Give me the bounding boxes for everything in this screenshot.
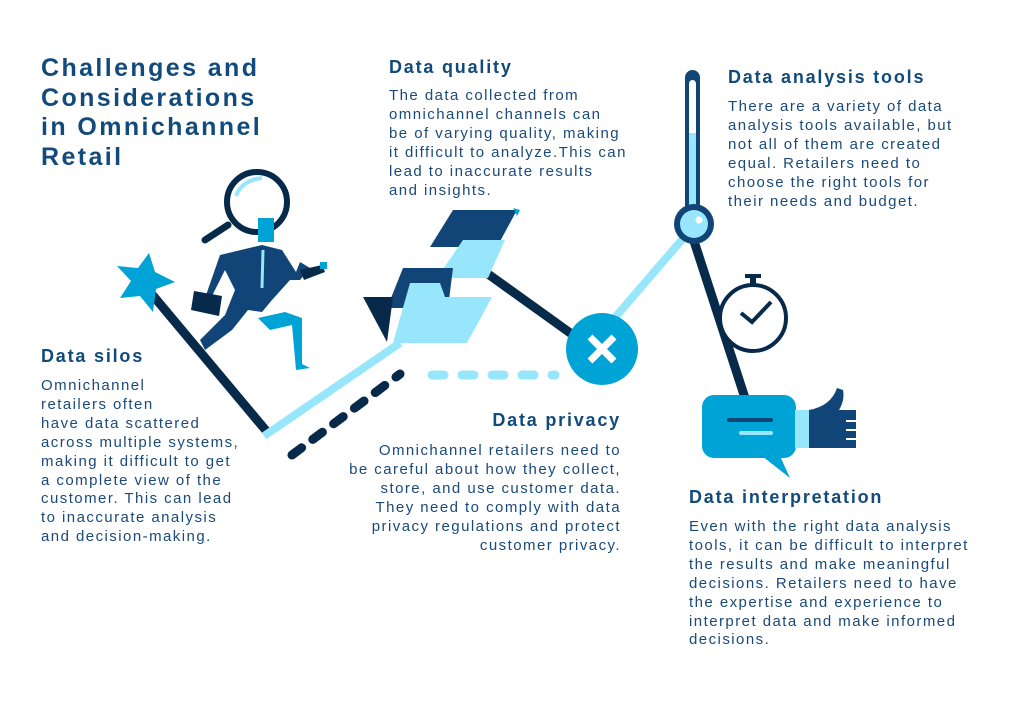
text: data privacy: be careful about how they collect, (349, 461, 621, 478)
icon: speech bubble thumb (702, 388, 858, 478)
icon: magnifier person (191, 172, 327, 370)
title (41, 54, 262, 170)
heading: data privacy: Data privacy (492, 410, 621, 430)
text: data interpretation: Even with the right data analysis (689, 518, 952, 535)
text: data analysis tools (728, 98, 953, 210)
icon: x circle (566, 313, 638, 385)
text: data privacy: privacy regulations and protect (372, 518, 621, 535)
text: data analysis tools: their needs and budget. (728, 193, 919, 210)
text: data quality: omnichannel channels can (389, 106, 601, 123)
text: data silos: to inaccurate analysis (41, 509, 217, 526)
text: data silos: a complete view of the (41, 472, 222, 489)
text: data interpretation: tools, it can be difficult to interpret (689, 537, 969, 554)
text: data quality: it difficult to analyze.This can (389, 144, 627, 161)
text: data privacy: They need to comply with data (376, 499, 621, 516)
heading: data interpretation: Data interpretation (689, 487, 883, 507)
text: data interpretation: interpret data and make informed (689, 613, 956, 630)
heading: data analysis tools: Data analysis tools (728, 67, 925, 87)
icon: folders (363, 208, 520, 343)
heading: data quality: Data quality (389, 57, 513, 77)
title: Challenges and (41, 54, 259, 82)
text: data analysis tools: analysis tools available, but (728, 117, 953, 134)
text: data silos: customer. This can lead (41, 490, 232, 507)
text: data silos: retailers often (41, 396, 154, 413)
title: Retail (41, 142, 123, 170)
text: data silos: making it difficult to get (41, 453, 231, 470)
text: data silos: and decision-making. (41, 528, 212, 545)
text: data silos: Omnichannel (41, 377, 145, 394)
text: data quality: The data collected from (389, 87, 579, 104)
icon: thermometer (674, 70, 714, 244)
text: data analysis tools: equal. Retailers need to (728, 155, 921, 172)
text: data quality: lead to inaccurate results (389, 163, 593, 180)
icon: stopwatch (720, 274, 786, 351)
text: data silos: have data scattered (41, 415, 200, 432)
text: data privacy: store, and use customer data. (380, 480, 621, 497)
text: data quality: and insights. (389, 182, 492, 199)
text: data silos (41, 377, 239, 545)
path lines (150, 228, 745, 455)
title: in Omnichannel (41, 113, 262, 141)
text: data interpretation: the results and make meaningful (689, 556, 951, 573)
text: data interpretation: decisions. Retailers need to have (689, 575, 958, 592)
text: data privacy: customer privacy. (480, 537, 621, 554)
text: data interpretation: decisions. (689, 631, 770, 648)
text: data interpretation: the expertise and experience to (689, 594, 943, 611)
text: data quality (389, 87, 627, 199)
icon: star (117, 253, 175, 312)
title: Considerations (41, 84, 257, 112)
text: data quality: be of varying quality, making (389, 125, 620, 142)
heading: data silos: Data silos (41, 346, 144, 366)
text: data privacy: Omnichannel retailers need to (379, 442, 621, 459)
text: data interpretation (689, 518, 969, 648)
text: data analysis tools: There are a variety of data (728, 98, 943, 115)
text: data privacy (349, 442, 621, 554)
text: data silos: across multiple systems, (41, 434, 239, 451)
text: data analysis tools: not all of them are created (728, 136, 941, 153)
text: data analysis tools: choose the right tools for (728, 174, 930, 191)
